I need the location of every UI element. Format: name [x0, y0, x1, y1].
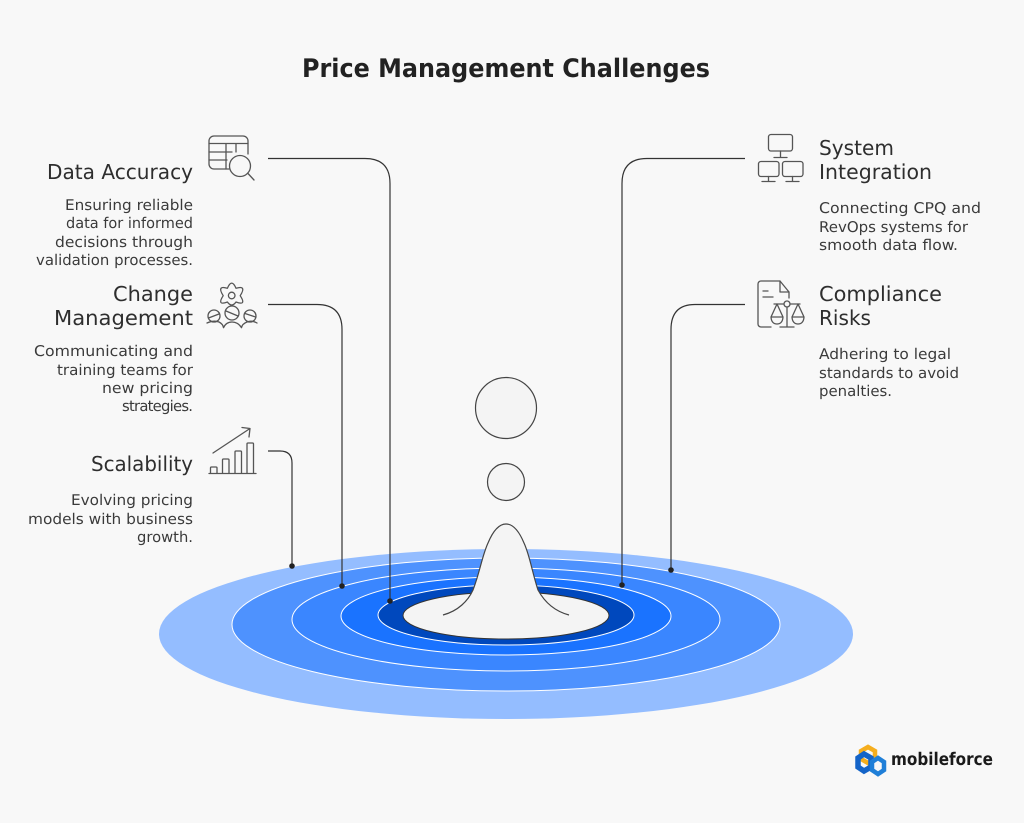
title: Price Management Challenges: [302, 54, 710, 84]
icon: gear and people: [207, 283, 257, 328]
text: scalability description: growth.: [137, 529, 193, 546]
text: system integration description: [819, 200, 981, 254]
text: compliance risks description: Adhering to legal: [819, 346, 951, 363]
connector: compliance risks: [668, 304, 745, 573]
ripple rings: [159, 549, 853, 719]
heading: change management: [54, 282, 193, 330]
text: scalability description: models with business: [28, 511, 193, 528]
text: change management description: Communicating and: [34, 343, 193, 360]
icon: networked monitors: [758, 134, 803, 182]
connector: change management: [268, 304, 345, 589]
text: data accuracy description: data for informed: [66, 215, 193, 232]
heading: data accuracy: Data Accuracy: [47, 160, 193, 184]
text: change management description: [34, 343, 194, 415]
text: compliance risks description: penalties.: [819, 383, 892, 400]
heading: compliance risks: Compliance: [819, 282, 942, 306]
icon: table with magnifier: [209, 136, 254, 180]
text: scalability description: Evolving pricing: [71, 492, 193, 509]
heading: compliance risks: [819, 282, 942, 330]
small droplet: [488, 464, 524, 500]
text: data accuracy description: validation processes.: [36, 252, 193, 269]
connector: scalability: [268, 451, 295, 569]
text: scalability description: [28, 492, 193, 546]
text: change management description: new pricing: [102, 380, 193, 397]
logo: mobileforce: mobileforce: [891, 750, 993, 770]
text: compliance risks description: [819, 346, 959, 400]
heading: change management: Change: [113, 282, 193, 306]
icon: document with scales: [758, 281, 804, 327]
logo: mobileforce: [858, 747, 993, 774]
water splash hump: [443, 524, 569, 615]
text: change management description: training teams for: [57, 362, 194, 379]
connector: system integration: [619, 158, 745, 588]
heading: change management: Management: [54, 306, 193, 330]
text: data accuracy description: Ensuring reliable: [65, 197, 193, 214]
heading: scalability: Scalability: [91, 452, 193, 476]
heading: compliance risks: Risks: [819, 306, 871, 330]
text: system integration description: Connecting CPQ and: [819, 200, 981, 217]
connector: data accuracy: [268, 158, 393, 604]
text: data accuracy description: decisions through: [55, 234, 193, 251]
text: system integration description: RevOps systems for: [819, 219, 969, 236]
text: compliance risks description: standards to avoid: [819, 365, 959, 382]
text: data accuracy description: [36, 197, 193, 269]
large droplet: [476, 378, 536, 438]
icon: growth chart: [209, 428, 256, 474]
heading: system integration: System: [819, 136, 894, 160]
text: change management description: strategies.: [122, 398, 193, 415]
text: system integration description: smooth data flow.: [819, 237, 958, 254]
heading: system integration: [819, 136, 932, 184]
heading: system integration: Integration: [819, 160, 932, 184]
